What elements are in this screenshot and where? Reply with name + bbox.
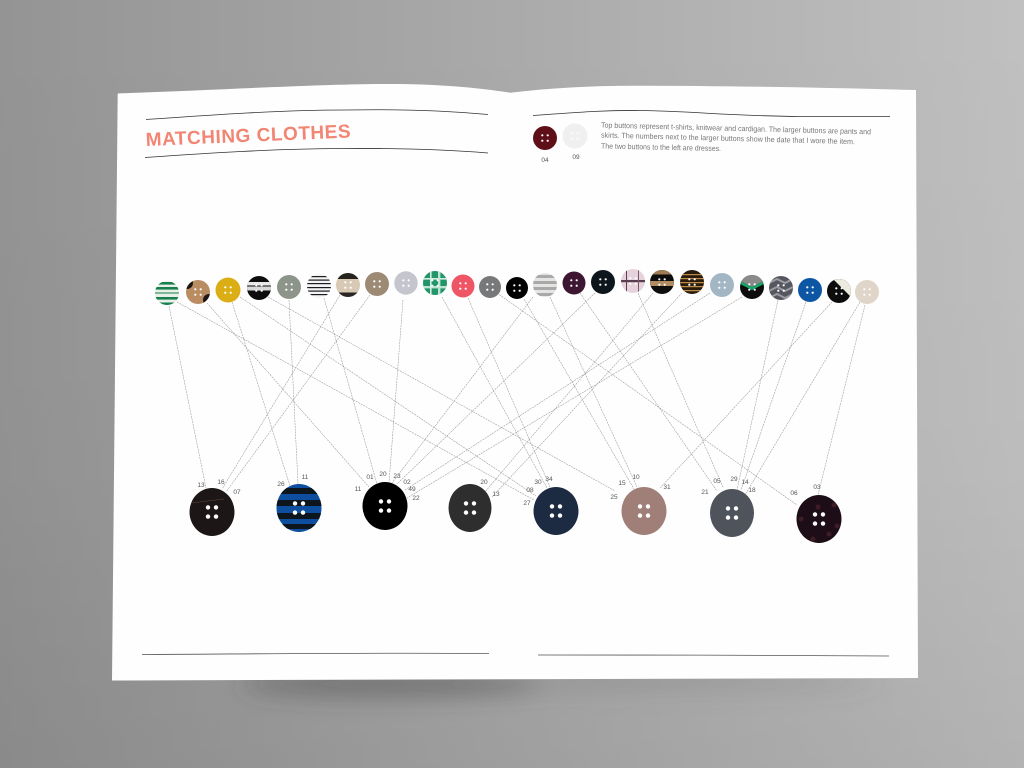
title: MATCHING CLOTHES: [145, 121, 351, 151]
button: grey green: [277, 275, 301, 299]
date numbers: 25: [610, 494, 618, 501]
rules: [142, 110, 890, 656]
date numbers: 11: [355, 486, 362, 493]
description text: Top buttons represent t-shirts, knitwear and cardigan. The larger buttons are pants and: [601, 121, 871, 136]
large button 8: dark with dots: [796, 495, 842, 543]
date numbers: 31: [663, 484, 671, 491]
date numbers: 11: [302, 474, 309, 481]
button: green stripes: [155, 281, 179, 306]
date numbers: 21: [701, 489, 709, 496]
button: thin black stripes: [307, 274, 331, 298]
date numbers: 29: [730, 476, 738, 483]
top row of small buttons: [155, 269, 879, 306]
description text: [601, 121, 871, 153]
button: tan with black: [186, 280, 210, 304]
date numbers: 15: [618, 480, 626, 487]
date numbers: [197, 471, 821, 507]
button: blue grey: [710, 273, 734, 297]
date numbers: 18: [748, 487, 756, 494]
button: black and cream: [827, 279, 851, 303]
large button 5: navy: [534, 487, 578, 535]
date numbers: 49: [408, 486, 416, 493]
date numbers: 02: [403, 479, 411, 486]
date numbers: 22: [412, 495, 420, 502]
bottom row of large buttons: [189, 482, 842, 543]
date numbers: 34: [545, 476, 553, 483]
date numbers: 16: [217, 479, 225, 486]
button: blue: [798, 278, 822, 302]
date numbers: 06: [790, 490, 798, 497]
date numbers: 20: [379, 471, 387, 478]
large button 4: charcoal: [448, 484, 492, 532]
date numbers: 13: [197, 482, 205, 489]
large button 2: blue and black stripes: [276, 484, 322, 532]
legend number 09: 09: [572, 154, 580, 161]
button: black and white bands: [247, 276, 271, 300]
button: burgundy: [562, 272, 586, 294]
date numbers: 26: [277, 481, 285, 488]
page shadow: [240, 672, 880, 696]
button: mid grey: [479, 276, 501, 298]
date numbers: 27: [523, 500, 531, 507]
connection lines: [169, 293, 865, 505]
date numbers: 05: [713, 478, 721, 485]
date numbers: 10: [632, 474, 640, 481]
button: yellow: [216, 278, 240, 302]
date numbers: 23: [393, 473, 401, 480]
icon: dress button 09: [562, 124, 588, 148]
icon: dress button 04: [533, 126, 557, 150]
date numbers: 07: [233, 489, 241, 496]
button: green plaid: [423, 271, 447, 295]
button: brown stripes: [680, 270, 704, 294]
button: grey stripes: [533, 273, 557, 297]
button: grey weave: [769, 276, 793, 300]
button: navy black: [591, 270, 615, 294]
date numbers: 30: [534, 479, 542, 486]
large button 6: dusty pink: [622, 487, 666, 535]
button: black with green chevron: [740, 275, 764, 299]
large button 7: slate grey: [710, 489, 754, 537]
legend number 04: 04: [541, 157, 549, 164]
date numbers: 03: [813, 484, 821, 491]
description text: skirts. The numbers next to the larger buttons show the date that I wore the item.: [601, 131, 855, 146]
open booklet spread: [112, 84, 918, 680]
button: black and tan: [650, 270, 674, 294]
date numbers: 13: [492, 491, 500, 498]
date numbers: 01: [366, 474, 374, 481]
legend: dress buttons: [533, 124, 588, 164]
date numbers: 08: [526, 487, 534, 494]
large button 1: dark brown: [189, 488, 235, 536]
button: black: [506, 277, 528, 299]
button: pink plaid: [621, 269, 645, 293]
button: coral: [452, 274, 474, 298]
date numbers: 20: [480, 479, 488, 486]
description text: The two buttons to the left are dresses.: [601, 142, 721, 153]
button: beige and black: [336, 273, 360, 298]
large button 3: black: [362, 482, 408, 530]
button: taupe: [365, 272, 389, 296]
date numbers: 14: [741, 479, 749, 486]
button: cream: [855, 280, 879, 304]
button: light grey: [394, 271, 418, 295]
